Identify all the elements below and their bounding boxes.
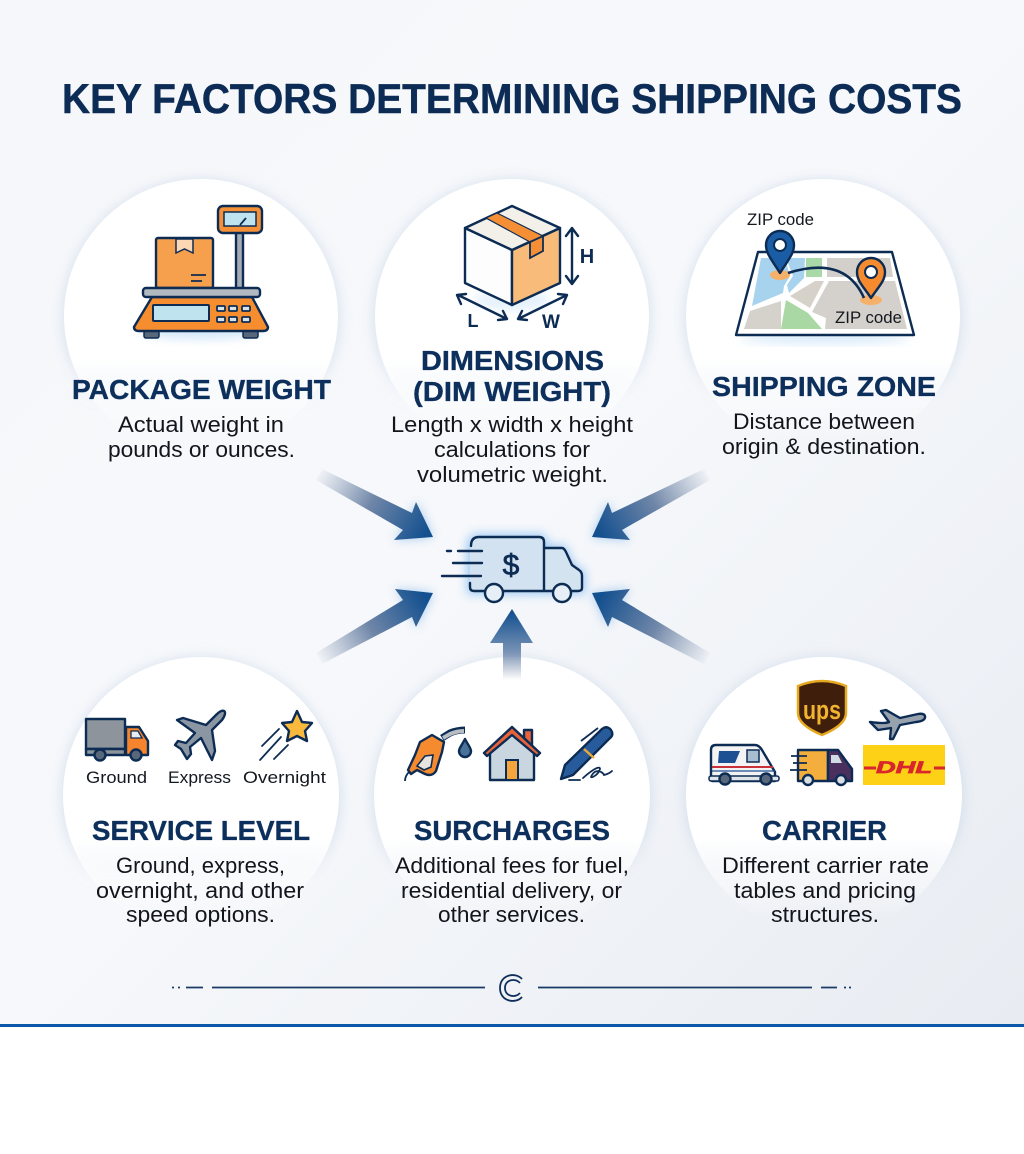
icon: pen signing bbox=[561, 727, 612, 780]
description: surcharges: Additional fees for fuel, bbox=[395, 853, 629, 878]
icon: overnight star bbox=[260, 711, 312, 760]
labels: service options: Overnight bbox=[243, 768, 326, 787]
icon: DHL logo: DHL bbox=[876, 758, 932, 777]
bottom blue rule bbox=[0, 1024, 1024, 1027]
icon: express plane bbox=[175, 711, 225, 760]
panel: dimensions bbox=[375, 179, 649, 487]
description: dimensions: Length x width x height bbox=[391, 412, 633, 437]
icon: carrier plane bbox=[870, 710, 925, 739]
description: shipping zone bbox=[722, 409, 926, 459]
description: carrier: structures. bbox=[771, 902, 879, 927]
description: dimensions: volumetric weight. bbox=[417, 462, 608, 487]
heading: carrier: CARRIER bbox=[762, 815, 887, 846]
icon: USPS van bbox=[709, 745, 779, 784]
icon: delivery truck bbox=[790, 750, 852, 785]
description: carrier: tables and pricing bbox=[734, 878, 916, 903]
description: carrier: Different carrier rate bbox=[722, 853, 929, 878]
heading: dimensions: (DIM WEIGHT) bbox=[413, 376, 611, 407]
icon: map with ZIP code pins bbox=[736, 210, 914, 343]
icon: UPS shield: ups bbox=[803, 695, 841, 725]
icon: box with L W H arrows: H bbox=[580, 246, 594, 268]
icon: ground truck bbox=[86, 719, 148, 760]
description: dimensions bbox=[391, 412, 633, 487]
description: service level bbox=[96, 853, 304, 927]
icon: map with ZIP code pins: ZIP code bbox=[835, 308, 902, 327]
icon: map with ZIP code pins: ZIP code bbox=[747, 210, 814, 229]
description: package weight bbox=[108, 412, 295, 462]
arrow: service level to truck bbox=[316, 589, 433, 664]
heading: dimensions bbox=[413, 345, 611, 407]
icon: DHL logo bbox=[863, 745, 945, 785]
panel: package weight bbox=[64, 179, 338, 462]
arrow: shipping zone to truck bbox=[592, 469, 710, 540]
arrow: carrier to truck bbox=[592, 589, 710, 664]
description: service level: Ground, express, bbox=[116, 853, 285, 878]
description: surcharges: residential delivery, or bbox=[401, 878, 622, 903]
heading: shipping zone: SHIPPING ZONE bbox=[712, 371, 936, 402]
arrow: surcharges to truck bbox=[490, 609, 533, 680]
panel: service level bbox=[63, 657, 339, 935]
labels: service options: Ground bbox=[86, 768, 147, 787]
description: surcharges bbox=[395, 853, 629, 927]
description: service level: overnight, and other bbox=[96, 878, 304, 903]
arrow: package weight to truck bbox=[316, 469, 433, 540]
icon: box with L W H arrows: L bbox=[468, 311, 478, 331]
description: package weight: Actual weight in bbox=[118, 412, 284, 437]
description: service level: speed options. bbox=[126, 902, 275, 927]
description: package weight: pounds or ounces. bbox=[108, 437, 295, 462]
icon: house bbox=[484, 727, 540, 780]
heading: package weight: PACKAGE WEIGHT bbox=[72, 374, 331, 405]
icon: parcel scale bbox=[134, 206, 268, 339]
icon: fuel nozzle bbox=[405, 730, 471, 781]
icon: central truck with dollar sign: $ bbox=[503, 549, 520, 582]
labels: service options bbox=[86, 768, 326, 787]
description: surcharges: other services. bbox=[438, 902, 585, 927]
description: dimensions: calculations for bbox=[434, 437, 590, 462]
icon: box with L W H arrows: W bbox=[542, 312, 560, 333]
description: shipping zone: origin & destination. bbox=[722, 434, 926, 459]
title: KEY FACTORS DETERMINING SHIPPING COSTS bbox=[62, 75, 962, 122]
panel: surcharges bbox=[374, 657, 650, 935]
heading: dimensions: DIMENSIONS bbox=[421, 345, 604, 376]
heading: service level: SERVICE LEVEL bbox=[92, 815, 310, 846]
icon: central truck with dollar sign bbox=[442, 537, 582, 602]
heading: surcharges: SURCHARGES bbox=[414, 815, 610, 846]
panel: carrier bbox=[686, 657, 962, 935]
icon: UPS shield bbox=[798, 681, 846, 735]
panel: shipping zone bbox=[686, 179, 960, 459]
labels: service options: Express bbox=[168, 768, 231, 787]
icon: box with L W H arrows bbox=[457, 206, 594, 333]
description: carrier bbox=[722, 853, 929, 927]
footer divider with C emblem bbox=[172, 975, 851, 1001]
description: shipping zone: Distance between bbox=[733, 409, 915, 434]
